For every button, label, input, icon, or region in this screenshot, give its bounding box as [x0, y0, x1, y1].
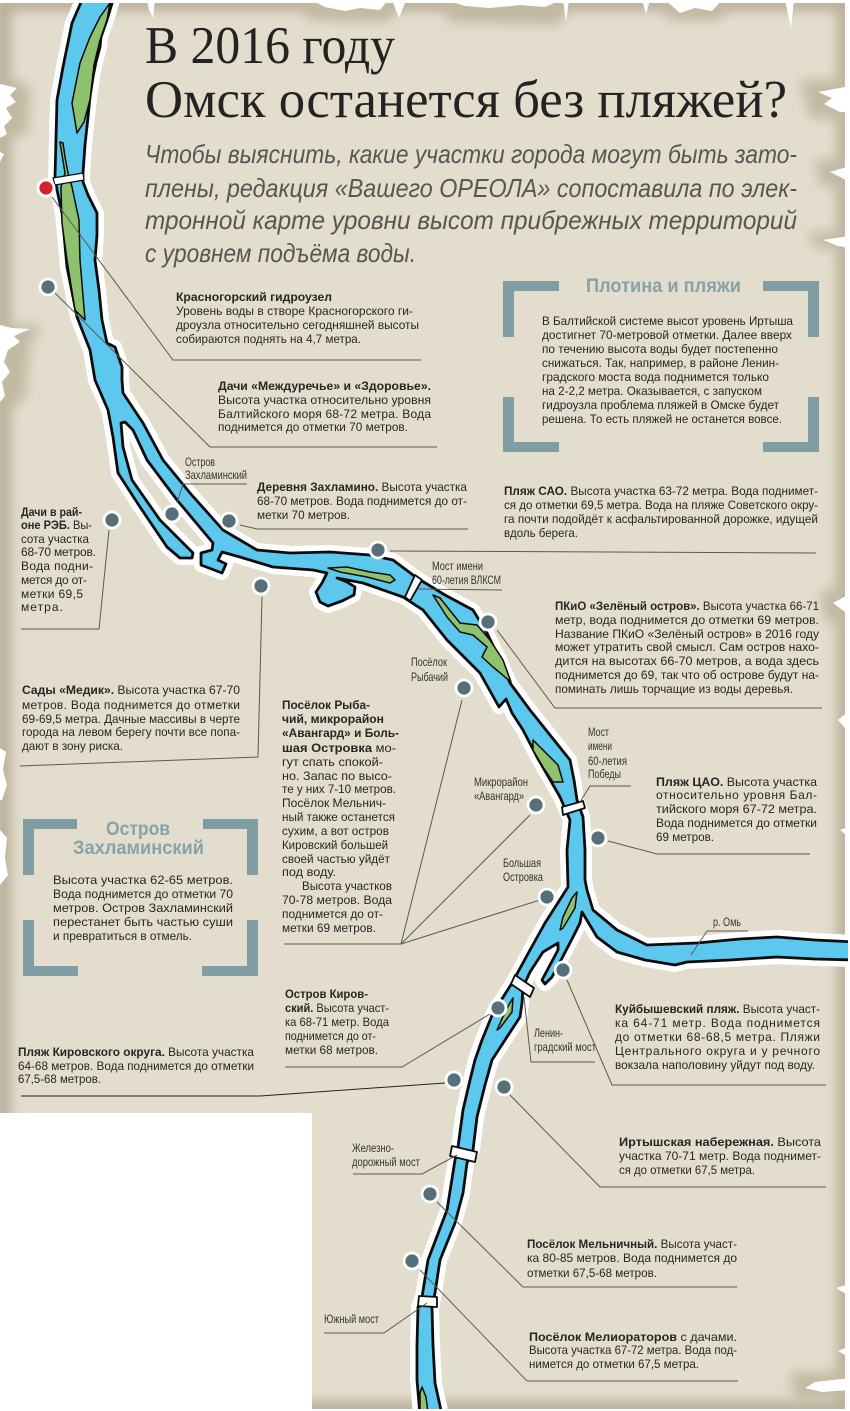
- callout: Дачи в районе РЭБ: оне РЭБ. Вы-: [21, 518, 92, 532]
- callout: Посёлок Мельничный: [437, 1202, 737, 1287]
- callout: Куйбышевский пляж: ка 64-71 метр. Вода поднимется: [615, 1016, 820, 1030]
- callout: Иртышская набережная: [510, 1095, 826, 1187]
- callout: Пляж ЦАО: 69 метров.: [656, 830, 714, 844]
- map labels: bridges and places: р. Омь: [713, 915, 741, 929]
- callout: ПКиО Зелёный остров: [497, 599, 822, 708]
- callout: Посёлок Мелиораторов: нимется до отметки 67,5 метра.: [529, 1357, 699, 1371]
- callout: Посёлок Рыбачий, Авангард, Большая Островка: [282, 698, 540, 944]
- callout: Посёлок Рыбачий, Авангард, Большая Островка: Высота участков: [302, 879, 392, 893]
- callout: Посёлок Рыбачий, Авангард, Большая Островка: сухим, а вот остров: [282, 824, 389, 838]
- callout: Остров Кировский: ский. Высота участ-: [285, 1001, 389, 1015]
- callout: Пляж ЦАО: Пляж ЦАО. Высота участка: [656, 775, 817, 789]
- intro text: с уровнем подъёма воды.: [145, 238, 416, 268]
- title: Омск останется без пляжей?: [145, 71, 787, 129]
- callout: Сады Медик: города на левом берегу почти все попа-: [22, 725, 240, 739]
- callout: Пляж САО: [390, 484, 818, 553]
- callout: ПКиО Зелёный остров: Название ПКиО «Зелёный остров» в 2016 году: [555, 627, 819, 641]
- callout: Посёлок Рыбачий, Авангард, Большая Островка: своей частью уйдёт: [282, 852, 390, 866]
- map labels: bridges and places: Мост: [588, 725, 609, 739]
- panel: Плотина и пляжи: на 2-2,2 метра. Оказывается, с запуском: [542, 384, 762, 398]
- panel: Плотина и пляжи: по течению высота воды будет постепенно: [542, 342, 778, 356]
- callout: Дачи в районе РЭБ: сота участка: [21, 532, 89, 546]
- callout: Пляж Кировского округа: [18, 1045, 445, 1096]
- callout: Посёлок Рыбачий, Авангард, Большая Островка: гут спать спокой-: [282, 755, 383, 769]
- callout: Посёлок Рыбачий, Авангард, Большая Островка: те у них 7-10 метров.: [282, 782, 396, 796]
- callout: Посёлок Рыбачий, Авангард, Большая Островка: Кировский большей: [282, 838, 388, 852]
- white block lower left: [0, 1113, 312, 1411]
- callout: ПКиО Зелёный остров: метр, вода поднимется до отметки 69 метров.: [555, 613, 819, 627]
- callout: Пляж Кировского округа: Пляж Кировского округа. Высота участка: [18, 1045, 254, 1059]
- callout: Красногорский гидроузел: [52, 197, 421, 360]
- panel: Остров Захламинский: Остров: [106, 819, 170, 840]
- callout: Посёлок Мельничный: отметки 67,5-68 метров.: [527, 1266, 657, 1280]
- callout: Посёлок Рыбачий, Авангард, Большая Островка: шая Островка мо-: [282, 741, 396, 755]
- callout: Дачи Междуречье и Здоровье: Высота участка относительно уровня: [218, 393, 431, 407]
- callout: Красногорский гидроузел: дроузла относительно сегодняшней высоты: [176, 318, 419, 332]
- map labels: bridges and places: Мост имени: [432, 559, 483, 573]
- callout: ПКиО Зелёный остров: дится на высотах 66-70 метров, а вода здесь: [555, 654, 819, 668]
- callout: Дачи в районе РЭБ: Дачи в рай-: [21, 505, 82, 519]
- panel: Плотина и пляжи: градского моста вода поднимется только: [542, 370, 769, 384]
- callout: Иртышская набережная: Иртышская набережная. Высота: [619, 1135, 821, 1149]
- callout: Сады Медик: 69-69,5 метра. Дачные массивы в черте: [22, 712, 240, 726]
- callout: Посёлок Мелиораторов: Посёлок Мелиораторов с дачами.: [529, 1330, 737, 1344]
- callout: Пляж ЦАО: тийского моря 67-72 метра.: [656, 802, 817, 816]
- panel: Остров Захламинский: метров. Остров Захламинский: [53, 901, 233, 915]
- callout: Посёлок Рыбачий, Авангард, Большая Островка: под воду.: [282, 865, 336, 879]
- map labels: bridges and places: Победы: [588, 767, 621, 781]
- callout: Посёлок Рыбачий, Авангард, Большая Островка: метки 69 метров.: [282, 921, 376, 935]
- callout: Красногорский гидроузел: собираются поднять на 4,7 метра.: [176, 332, 361, 346]
- callout: Посёлок Мельничный: ка 80-85 метров. Вода поднимется до: [527, 1251, 737, 1265]
- callout: Сады Медик: Сады «Медик». Высота участка 67-70: [22, 683, 240, 697]
- callout: Куйбышевский пляж: Куйбышевский пляж. Высота участ-: [615, 1002, 820, 1016]
- map labels: bridges and places: Большая: [503, 856, 541, 870]
- callout: Пляж ЦАО: Вода поднимется до отметки: [656, 816, 817, 830]
- callout: Куйбышевский пляж: Центрального округа и у речного: [615, 1044, 820, 1058]
- map labels: bridges and places: «Авангард»: [474, 789, 524, 803]
- panel: Плотина и пляжи: достигнет 70-метровой отметки. Далее вверх: [542, 328, 792, 342]
- callout: Остров Кировский: поднимется до от-: [285, 1029, 376, 1043]
- callout: Посёлок Рыбачий, Авангард, Большая Островка: «Авангард» и Боль-: [282, 726, 399, 740]
- map labels: bridges and places: Рыбачий: [411, 670, 448, 684]
- callout: Остров Кировский: ка 68-71 метр. Вода: [285, 1015, 389, 1029]
- callout: Куйбышевский пляж: вокзала наполовину уйдут под воду.: [615, 1058, 815, 1072]
- callout: Куйбышевский пляж: до отметки 68-68,5 метра. Пляжи: [615, 1030, 820, 1044]
- map labels: bridges and places: градский мост: [534, 1040, 596, 1054]
- islands: [60, 3, 577, 1411]
- panel: Остров Захламинский: Высота участка 62-65 метров.: [53, 873, 233, 887]
- callout: Дачи Междуречье и Здоровье: [55, 293, 437, 447]
- callout: Дачи в районе РЭБ: Вода подни-: [21, 559, 93, 573]
- callout: Посёлок Рыбачий, Авангард, Большая Островка: 70-78 метров. Вода: [282, 893, 392, 907]
- panel: Остров Захламинский: Вода поднимется до отметки 70: [53, 887, 233, 901]
- intro text: [145, 139, 797, 268]
- callout: Пляж ЦАО: [608, 775, 817, 854]
- map labels: bridges and places: [177, 455, 748, 1333]
- callout: Остров Кировский: [285, 987, 490, 1067]
- callout: ПКиО Зелёный остров: поминать лишь торчащие из воды деревья.: [555, 682, 793, 696]
- callout: Сады Медик: [20, 597, 262, 766]
- callout: Пляж САО: ся до отметки 69,5 метра. Вода на пляже Советского окру-: [504, 498, 818, 512]
- map labels: bridges and places: Железно-: [352, 1141, 394, 1155]
- map labels: bridges and places: Микрорайон: [474, 775, 528, 789]
- callout: ПКиО Зелёный остров: поднимется до 69, так что об острове будут на-: [555, 668, 819, 682]
- callout: ПКиО Зелёный остров: может утратить свой смысл. Сам остров нахо-: [555, 640, 819, 654]
- title: В 2016 году: [145, 17, 395, 75]
- panel: Плотина и пляжи: решена. То есть пляжей не останется вовсе.: [542, 412, 782, 426]
- panel: Остров Захламинский: перестанет быть частью суши: [53, 915, 233, 929]
- callout: Пляж САО: га почти подойдёт к асфальтированной дорожке, идущей: [504, 512, 818, 526]
- callout: Посёлок Рыбачий, Авангард, Большая Островка: ный также останется: [282, 810, 395, 824]
- callout: Дачи в районе РЭБ: мется до от-: [21, 573, 87, 587]
- callout: Пляж Кировского округа: 67,5-68 метров.: [18, 1072, 101, 1086]
- panel: Остров Захламинский: Захламинский: [73, 838, 204, 859]
- panel: Плотина и пляжи: гидроузла проблема пляжей в Омске будет: [542, 398, 779, 412]
- callout: Посёлок Мелиораторов: Высота участка 67-72 метра. Вода под-: [529, 1343, 737, 1357]
- callout: Дачи Междуречье и Здоровье: Балтийского моря 68-72 метра. Вода: [218, 407, 431, 421]
- callout: Дачи в районе РЭБ: 68-70 метров.: [21, 545, 96, 559]
- callout: Деревня Захламино: 68-70 метров. Вода поднимется до от-: [257, 494, 467, 508]
- callout: Посёлок Рыбачий, Авангард, Большая Островка: Посёлок Мельнич-: [282, 796, 386, 810]
- callout: Дачи Междуречье и Здоровье: поднимется до отметки 70 метров.: [218, 420, 408, 434]
- map labels: bridges and places: 60-летия ВЛКСМ: [432, 573, 501, 587]
- map labels: bridges and places: 60-летия: [588, 754, 627, 768]
- map labels: bridges and places: имени: [588, 739, 612, 753]
- panel: Плотина и пляжи: Плотина и пляжи: [586, 276, 741, 297]
- map markers: [38, 180, 606, 1269]
- callout: Красногорский гидроузел: Уровень воды в створе Красногорского ги-: [176, 304, 413, 318]
- callout: Деревня Захламино: [240, 480, 468, 529]
- callout: Дачи Междуречье и Здоровье: Дачи «Междуречье» и «Здоровье».: [218, 379, 431, 393]
- callout: Посёлок Рыбачий, Авангард, Большая Островка: чий, микрорайон: [282, 712, 384, 726]
- callout: Сады Медик: метров. Вода поднимется до отметки: [22, 698, 240, 712]
- callout: Красногорский гидроузел: Красногорский гидроузел: [176, 290, 332, 304]
- map labels: bridges and places: Посёлок: [411, 655, 448, 669]
- callout: Пляж Кировского округа: 64-68 метров. Вода поднимется до отметки: [18, 1059, 254, 1073]
- callout: Иртышская набережная: ся до отметки 67,5 метра.: [619, 1163, 755, 1177]
- map labels: bridges and places: Южный мост: [324, 1312, 379, 1326]
- callout: Дачи в районе РЭБ: [21, 505, 109, 629]
- callout: Остров Кировский: метки 68 метров.: [285, 1043, 378, 1057]
- callout: Посёлок Мельничный: Посёлок Мельничный. Высота участ-: [527, 1237, 737, 1251]
- callout: Сады Медик: дают в зону риска.: [22, 739, 123, 753]
- callout: Пляж САО: вдоль берега.: [504, 526, 578, 540]
- map labels: bridges and places: Остров: [185, 455, 215, 469]
- panel: Плотина и пляжи: снижаться. Так, например, в районе Ленин-: [542, 356, 779, 370]
- panel: Остров Захламинский: и превратиться в отмель.: [53, 929, 192, 943]
- map labels: bridges and places: Островка: [503, 870, 543, 884]
- callout: Пляж САО: Пляж САО. Высота участка 63-72 метра. Вода поднимет-: [504, 484, 818, 498]
- panel: Плотина и пляжи: [503, 276, 819, 452]
- title: [145, 17, 787, 129]
- callout: Посёлок Рыбачий, Авангард, Большая Островка: Посёлок Рыба-: [282, 698, 370, 712]
- callout: ПКиО Зелёный остров: ПКиО «Зелёный остров». Высота участка 66-71: [555, 599, 819, 613]
- callout: Деревня Захламино: метки 70 метров.: [257, 508, 350, 522]
- callout: Остров Кировский: Остров Киров-: [285, 987, 368, 1001]
- callout: Иртышская набережная: участка 70-71 метр. Вода поднимет-: [619, 1149, 821, 1163]
- callout: Посёлок Рыбачий, Авангард, Большая Островка: но. Запас по высо-: [282, 769, 392, 783]
- callout: Посёлок Рыбачий, Авангард, Большая Островка: поднимется до от-: [282, 907, 383, 921]
- map labels: bridges and places: дорожный мост: [352, 1155, 420, 1169]
- callout: Дачи в районе РЭБ: метки 69,5: [21, 587, 83, 601]
- map labels: bridges and places: Захламинский: [185, 468, 247, 482]
- map labels: bridges and places: Ленин-: [534, 1026, 563, 1040]
- callout: Дачи в районе РЭБ: метра.: [21, 600, 63, 614]
- panel: Остров Захламинский: [23, 819, 258, 976]
- bridges: [53, 173, 585, 1307]
- callout: Деревня Захламино: Деревня Захламино. Высота участка: [257, 480, 467, 494]
- callout: Посёлок Мелиораторов: [420, 1270, 738, 1381]
- callout: Куйбышевский пляж: [567, 980, 826, 1085]
- intro text: тронной карте уровни высот прибрежных территорий: [145, 205, 797, 235]
- callout: Пляж ЦАО: относительно уровня Бал-: [656, 788, 817, 802]
- panel: Плотина и пляжи: В Балтийской системе высот уровень Иртыша: [542, 314, 793, 328]
